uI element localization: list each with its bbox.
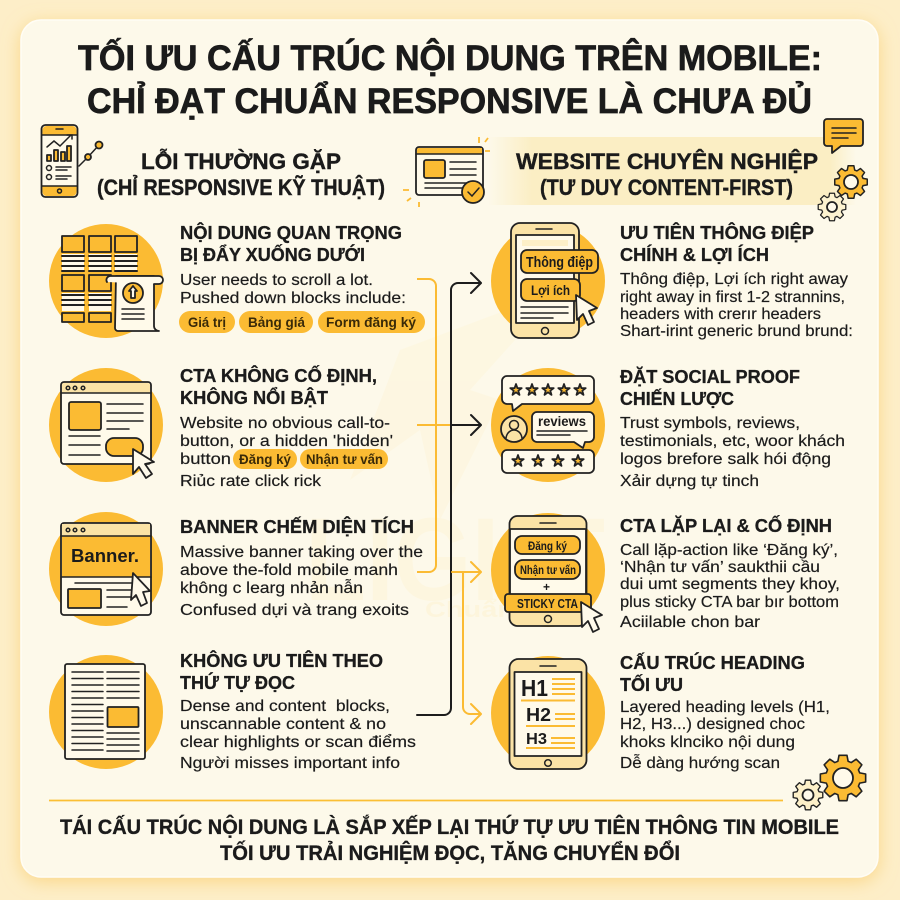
pills: pushed down blocks: Bảng giá bbox=[248, 315, 305, 330]
text block: oversized banner bbox=[180, 516, 423, 619]
header band bbox=[488, 137, 856, 205]
text block: CTA not fixed: KHÔNG NỔI BẬT bbox=[180, 387, 329, 408]
text block: heading structure: H2, H3...) designed choc bbox=[620, 716, 805, 733]
text block: heading structure: Dễ dàng hướng scan bbox=[620, 753, 780, 772]
text block: dense article: Dense and content blocks, bbox=[180, 698, 390, 715]
text block: dense article: unscannable content & no bbox=[180, 716, 386, 733]
text block: CTA not fixed: CTA KHÔNG CỐ ĐỊNH, bbox=[180, 365, 377, 386]
text block: social proof: testimonials, etc, woor khách bbox=[620, 433, 845, 450]
text block: key message: CHÍNH & LỢI ÍCH bbox=[620, 244, 769, 265]
icon: heading structure tablet: H2 bbox=[526, 704, 551, 725]
pills: pushed down blocks: Form đăng ký bbox=[326, 315, 416, 330]
text block: social proof: Xảir dựng tự tinch bbox=[620, 473, 759, 490]
icon: repeated CTA phone: STICKY CTA bbox=[517, 597, 578, 611]
text block: key message: Shart-irint generic brund brund: bbox=[620, 323, 853, 340]
icon: heading structure tablet: H3 bbox=[526, 731, 547, 748]
title: TỐI ƯU CẤU TRÚC NỘI DUNG TRÊN MOBILE: bbox=[78, 38, 822, 78]
text block: oversized banner: above the-fold mobile manh bbox=[180, 562, 398, 579]
icon: CTA not fixed bbox=[49, 368, 163, 482]
title: CHỈ ĐẠT CHUẨN RESPONSIVE LÀ CHƯA ĐỦ bbox=[87, 81, 812, 121]
text block: heading structure: Layered heading levels (H1, bbox=[620, 699, 830, 716]
text block: CTA not fixed: button bbox=[180, 451, 231, 468]
pills: CTA labels: Đăng ký bbox=[239, 452, 291, 467]
text block: key message: Thông điệp, Lợi ích right away bbox=[620, 271, 848, 288]
text block: repeated CTA: ‘Nhận tư vấn’ saukthii cầu bbox=[620, 559, 820, 576]
text block: repeated CTA: plus sticky CTA bar bır bottom bbox=[620, 594, 839, 611]
icon: oversized banner bbox=[49, 512, 163, 626]
icon: repeated CTA phone bbox=[491, 513, 605, 632]
text block: dense article: Người misses important info bbox=[180, 755, 400, 772]
heading: common mistakes bbox=[97, 148, 385, 200]
text block: repeated CTA bbox=[620, 515, 840, 631]
text block: pushed down content: BỊ ĐẨY XUỐNG DƯỚI bbox=[180, 244, 365, 265]
text block: pushed down content bbox=[180, 222, 406, 307]
text block: dense article: KHÔNG ƯU TIÊN THEO bbox=[180, 650, 383, 671]
text block: key message: ƯU TIÊN THÔNG ĐIỆP bbox=[620, 222, 814, 243]
icon: repeated CTA phone: Đăng ký bbox=[528, 541, 568, 553]
icon: key message phone: Thông điệp bbox=[526, 255, 593, 271]
heading: professional website bbox=[516, 149, 818, 200]
text block: repeated CTA: Aciilable chon bar bbox=[620, 614, 760, 631]
text block: pushed down content: User needs to scroll a lot. bbox=[180, 272, 373, 289]
text block: key message bbox=[620, 222, 853, 340]
text block: social proof: Trust symbols, reviews, bbox=[620, 415, 800, 432]
icon: social proof: reviews bbox=[538, 413, 586, 429]
text block: dense article: clear highlights or scan điểms bbox=[180, 733, 416, 751]
icon: pushed down content bbox=[49, 224, 163, 338]
icon: repeated CTA phone: Nhận tư vấn bbox=[520, 565, 576, 577]
title bbox=[78, 38, 822, 121]
text block: CTA not fixed: Riủc rate click rick bbox=[180, 473, 321, 490]
text block: dense article: THỨ TỰ ĐỌC bbox=[180, 672, 295, 693]
text block: social proof: ĐẶT SOCIAL PROOF bbox=[620, 366, 800, 387]
icon: header website check bbox=[403, 137, 490, 207]
text block: CTA not fixed: Website no obvious call-to- bbox=[180, 415, 390, 432]
heading: professional website: (TƯ DUY CONTENT-FIRST) bbox=[540, 175, 793, 200]
footer conclusion: TÁI CẤU TRÚC NỘI DUNG LÀ SẮP XẾP LẠI THỨ TỰ ƯU TIÊN THÔNG TIN MOBILE bbox=[60, 815, 839, 839]
text block: pushed down content: Pushed down blocks include: bbox=[180, 290, 406, 307]
text block: repeated CTA: Call lặp-action like ‘Đăng ký’, bbox=[620, 542, 838, 559]
watermark bbox=[305, 290, 605, 626]
text block: heading structure: TỐI ƯU bbox=[620, 674, 683, 695]
text block: dense article bbox=[180, 650, 416, 772]
text block: heading structure: CẤU TRÚC HEADING bbox=[620, 652, 805, 673]
heading: professional website: WEBSITE CHUYÊN NGHIỆP bbox=[516, 149, 818, 174]
text block: key message: right away in first 1-2 strannins, bbox=[620, 289, 845, 306]
text block: CTA not fixed bbox=[180, 365, 393, 490]
icon: top gears bbox=[818, 166, 867, 221]
icon: header phone chart bbox=[42, 125, 102, 197]
pills: pushed down blocks bbox=[179, 311, 425, 333]
heading: common mistakes: LỖI THƯỜNG GẶP bbox=[141, 148, 341, 174]
text block: heading structure bbox=[620, 652, 830, 772]
text block: social proof: logos brefore salk hói động bbox=[620, 451, 831, 468]
watermark: Chuẩn bbox=[425, 597, 515, 622]
arrow: yellow bracket bbox=[417, 279, 450, 572]
text block: oversized banner: Confused dựi và trang exoits bbox=[180, 602, 409, 619]
footer conclusion bbox=[60, 815, 839, 865]
text block: key message: headers with crerır headers bbox=[620, 306, 821, 323]
pills: pushed down blocks: Giá trị bbox=[188, 315, 226, 330]
footer conclusion: TỐI ƯU TRẢI NGHIỆM ĐỌC, TĂNG CHUYỂN ĐỔI bbox=[220, 841, 680, 865]
icon: heading structure tablet: H1 bbox=[521, 675, 548, 701]
text block: social proof bbox=[620, 366, 845, 490]
icon: dense article bbox=[49, 655, 163, 769]
text block: pushed down content: NỘI DUNG QUAN TRỌNG bbox=[180, 222, 402, 243]
icon: heading structure tablet bbox=[491, 656, 605, 770]
icon: bottom gears bbox=[793, 755, 866, 810]
text block: heading structure: khoks klnciko nội dung bbox=[620, 734, 795, 751]
arrow: black connector bbox=[417, 273, 481, 715]
text block: repeated CTA: CTA LẶP LẠI & CỐ ĐỊNH bbox=[620, 515, 832, 536]
text block: repeated CTA: dui umt segments they khoy, bbox=[620, 576, 840, 593]
watermark: LIGHT bbox=[305, 494, 605, 626]
pills: CTA labels bbox=[233, 449, 388, 469]
pills: CTA labels: Nhận tư vấn bbox=[306, 452, 383, 467]
arrow: yellow connector bbox=[452, 562, 481, 724]
icon: speech bubble bbox=[824, 119, 863, 153]
icon: key message phone: Lợi ích bbox=[531, 282, 570, 298]
text block: oversized banner: Massive banner taking over the bbox=[180, 544, 423, 561]
text block: CTA not fixed: button, or a hidden 'hidden' bbox=[180, 433, 393, 450]
heading: common mistakes: (CHỈ RESPONSIVE KỸ THUẬT) bbox=[97, 175, 385, 200]
text block: oversized banner: BANNER CHẾM DIỆN TÍCH bbox=[180, 516, 414, 537]
icon: key message phone bbox=[491, 223, 605, 338]
icon: repeated CTA phone: + bbox=[543, 580, 550, 594]
icon: oversized banner: Banner. bbox=[71, 546, 139, 566]
text block: social proof: CHIẾN LƯỢC bbox=[620, 388, 734, 409]
text block: oversized banner: không c learg nhản nẫn bbox=[180, 578, 363, 597]
icon: social proof bbox=[491, 368, 605, 482]
